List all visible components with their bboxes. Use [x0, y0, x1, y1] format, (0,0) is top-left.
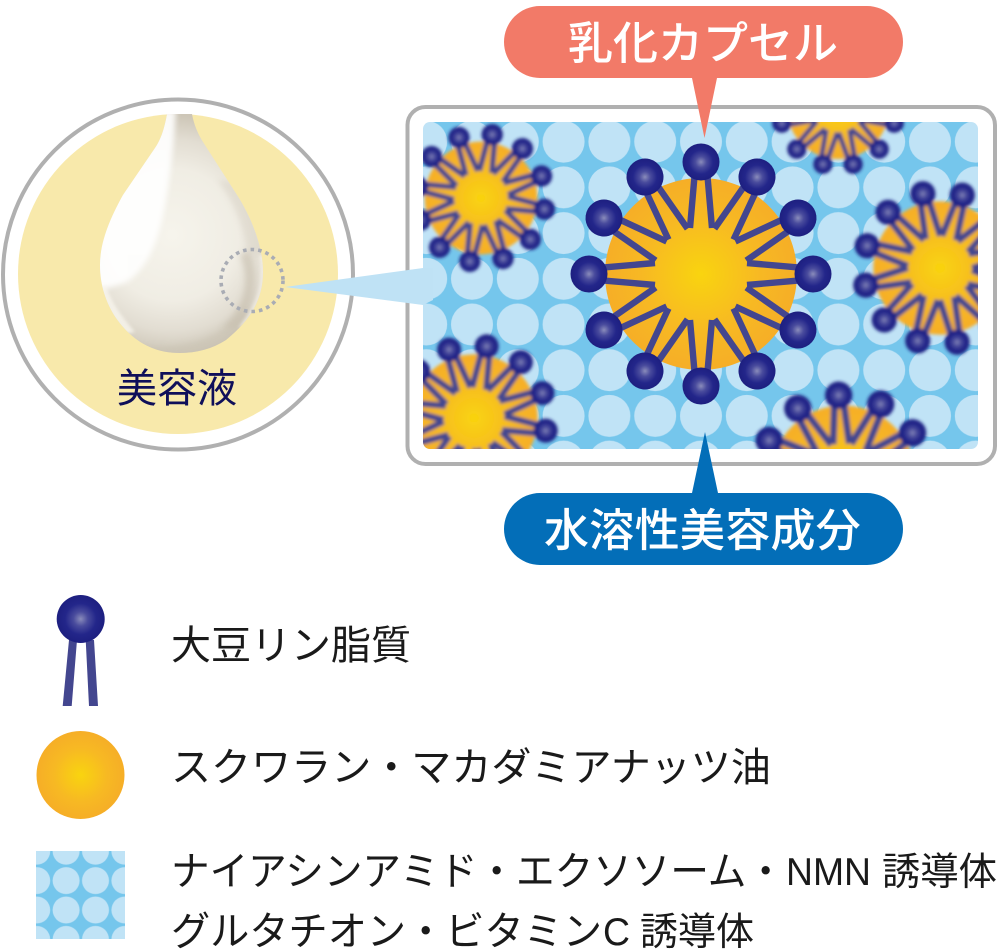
arrow: magnification beam	[285, 268, 433, 305]
yellow disc with grey ring	[3, 100, 353, 450]
legend: oils	[36, 731, 771, 819]
label: serum: 美容液	[117, 367, 237, 411]
panel: magnified emulsion	[406, 105, 997, 466]
legend text	[171, 850, 997, 950]
callout: emulsion capsule: 乳化カプセル	[568, 18, 838, 69]
legend text: 誘導体	[882, 851, 997, 894]
icon: dot swatch	[36, 851, 125, 939]
callout: emulsion capsule	[504, 6, 903, 138]
callout: water-soluble ingredients: 水溶性美容成分	[544, 505, 861, 556]
legend: soy lecithin	[57, 595, 411, 706]
icon: oil droplet	[36, 731, 124, 819]
frame	[408, 107, 995, 464]
capsule: main	[570, 144, 832, 404]
icon: phospholipid	[57, 595, 105, 706]
background: water-soluble ingredient dots	[423, 122, 978, 449]
legend: water-soluble ingredients	[36, 850, 997, 950]
capsule: bottom left	[423, 332, 560, 449]
panel: serum circle	[3, 100, 353, 450]
legend text: 大豆リン脂質	[171, 624, 411, 668]
water-soluble background and capsules	[423, 122, 978, 449]
capsule: bottom right	[753, 379, 929, 449]
callout: water-soluble ingredients	[504, 432, 903, 565]
icon: milky serum drop	[100, 114, 263, 353]
capsule: top	[770, 122, 906, 176]
legend text: ナイアシンアミド・エクソソーム・	[171, 850, 785, 894]
legend text: NMN	[786, 851, 871, 894]
legend text: スクワラン・マカダミアナッツ油	[171, 746, 771, 790]
dotted magnifier circle	[221, 250, 283, 312]
capsule: right	[850, 178, 978, 358]
capsule: top left	[423, 122, 558, 274]
